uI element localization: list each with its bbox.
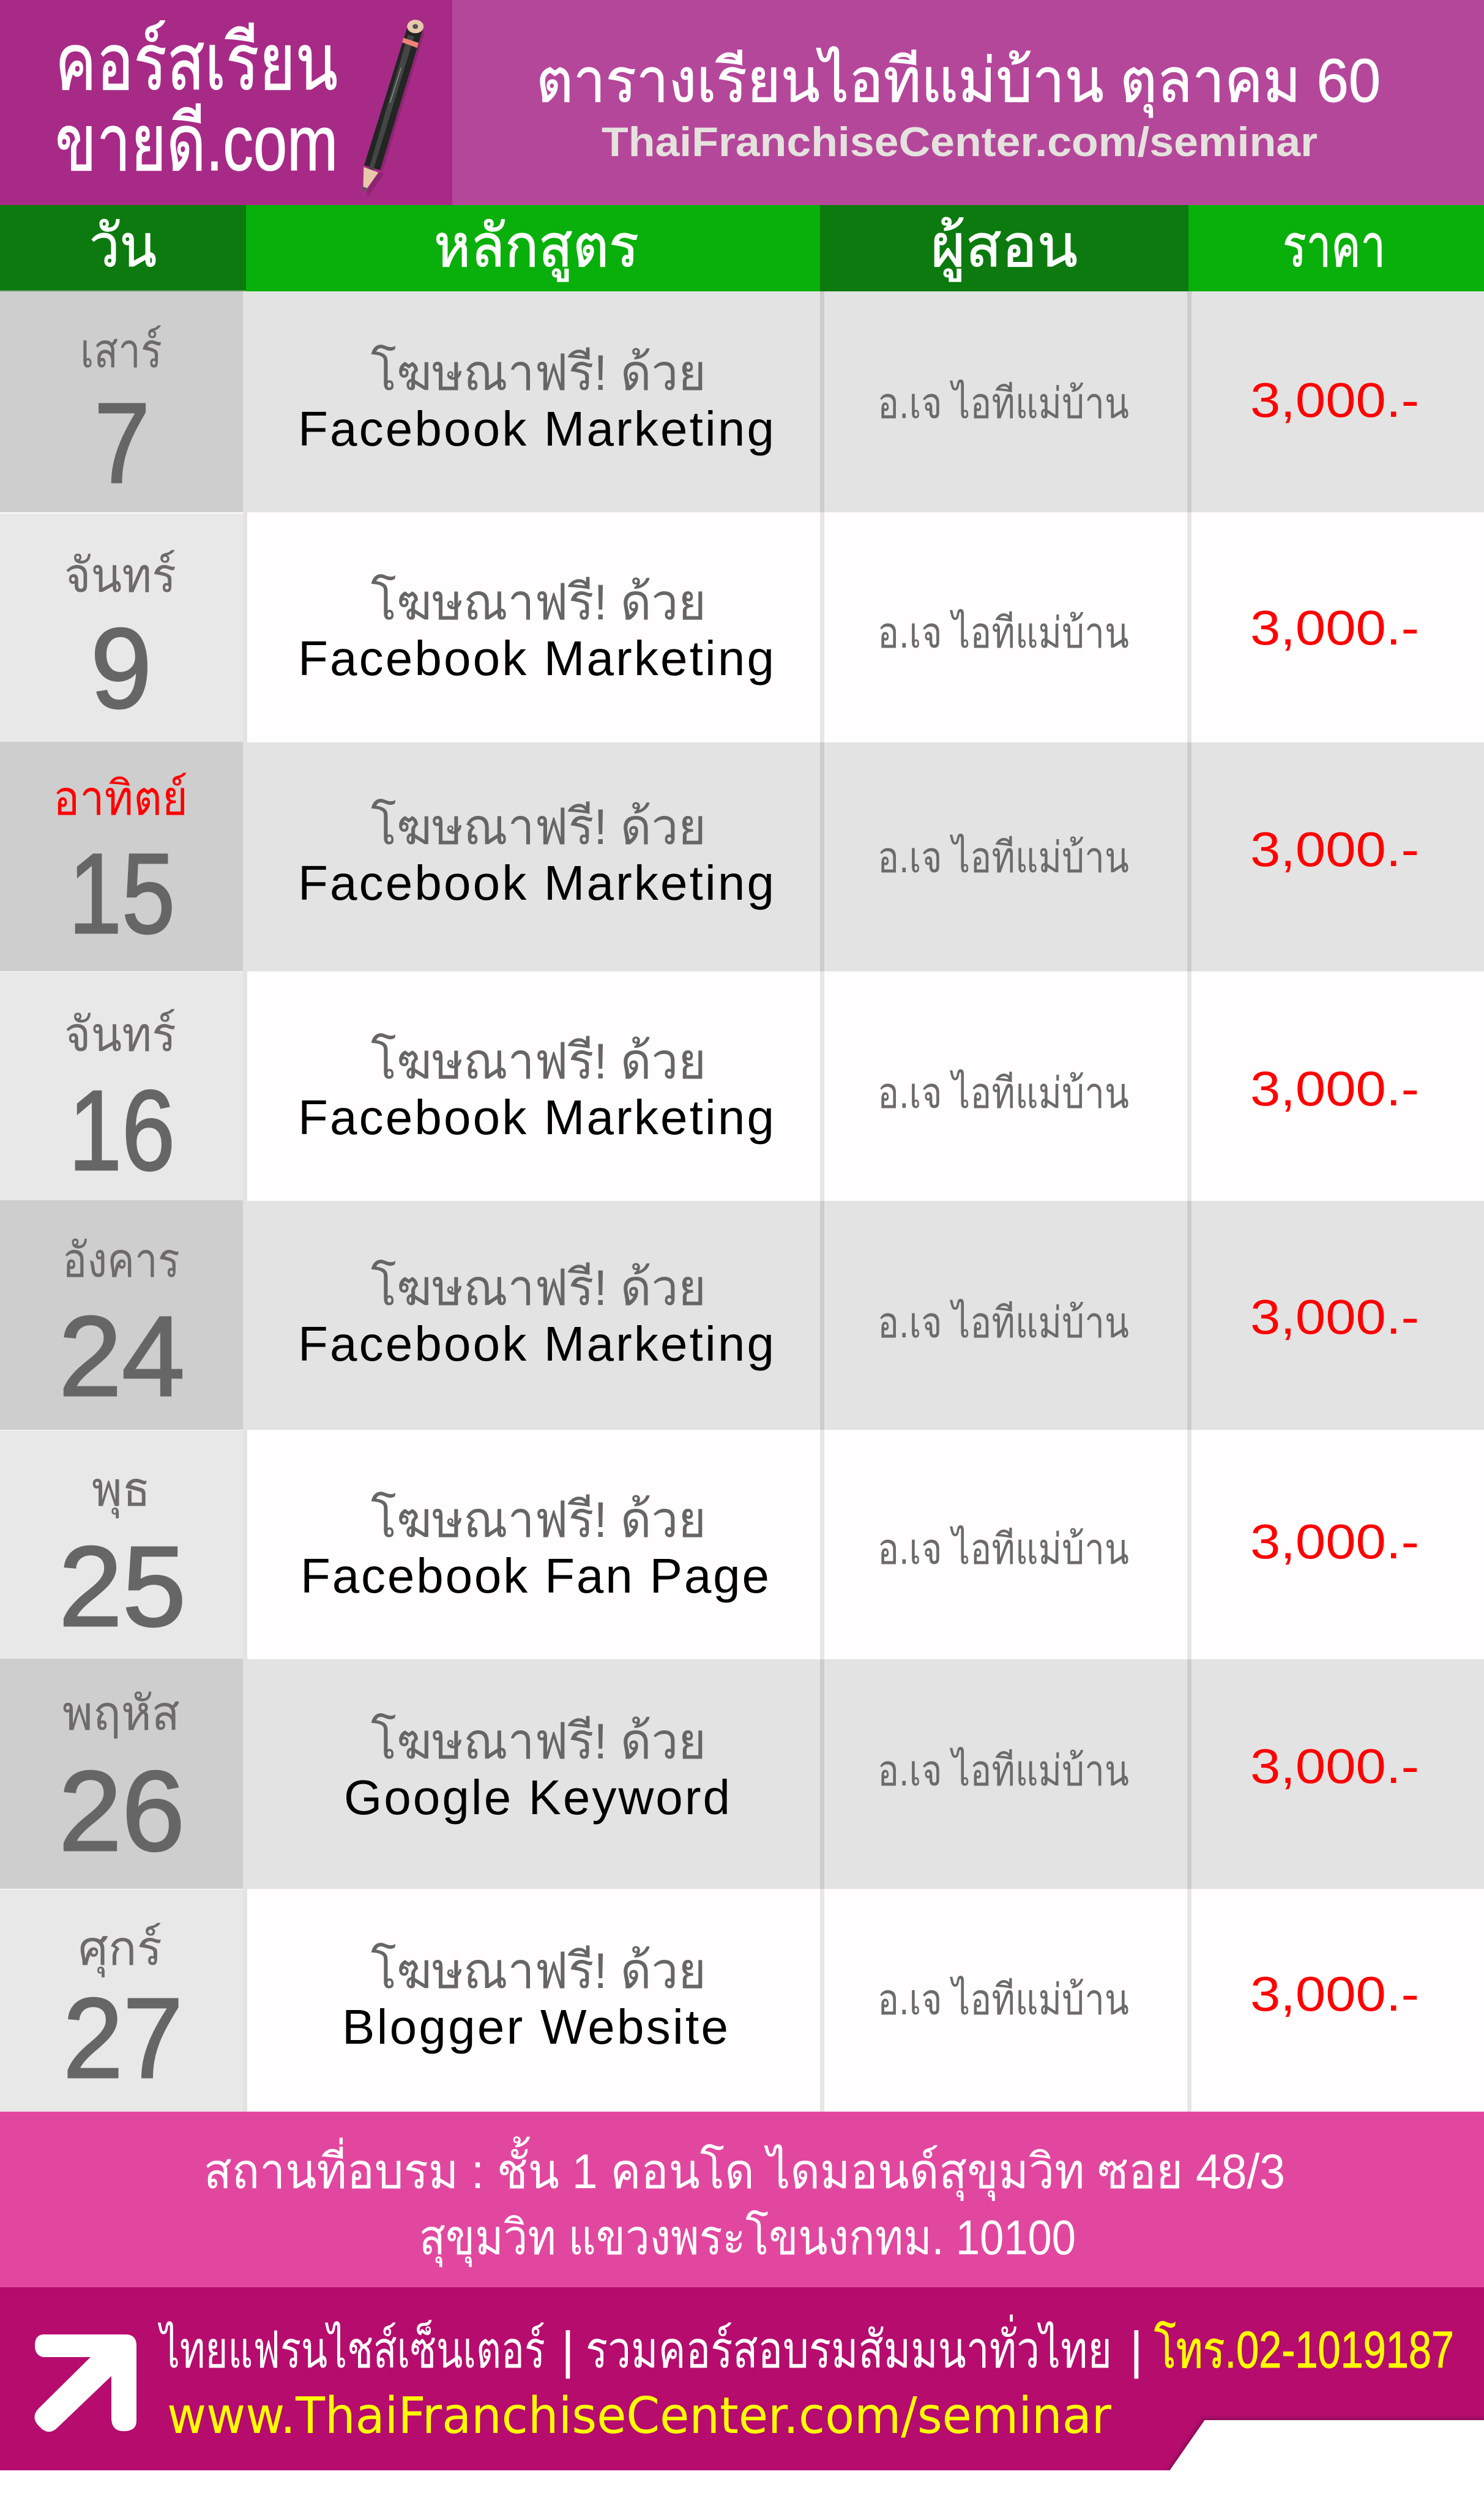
row 7: Thursday 26: Google Keyword (344, 1770, 730, 1825)
row 6: Wednesday 25: 25 (59, 1523, 186, 1650)
contact line white (157, 2314, 1143, 2379)
logo text line 2: ขายดี.com (55, 100, 338, 187)
contact line white: ไทยแฟรนไชส์เซ็นเตอร์ (157, 2320, 545, 2379)
row 4: Monday 16: 16 (69, 1067, 175, 1194)
row 6: Wednesday 25: พุธ (92, 1462, 151, 1519)
main title: ตารางเรียนไอทีแม่บ้าน ตุลาคม 60 (536, 47, 1381, 118)
header: course: หลักสูตร (434, 214, 639, 282)
row 7: Thursday 26: 26 (59, 1748, 185, 1875)
row 5: Tuesday 24: 3,000.- (1250, 1290, 1419, 1344)
row 4: Monday 16 (0, 971, 1484, 1201)
header: day: วัน (89, 214, 157, 279)
row 8: Friday 27: 27 (63, 1975, 183, 2102)
row 6: Wednesday 25: โฆษณาฟรี! ด้วย (371, 1492, 706, 1548)
row 6: Wednesday 25: 3,000.- (1250, 1514, 1419, 1569)
contact line white: | (561, 2321, 575, 2379)
row 7: Thursday 26: อ.เจ ไอทีแม่บ้าน (878, 1747, 1129, 1795)
row 4: Monday 16: จันทร์ (64, 1007, 176, 1061)
row 1: Saturday 7: 7 (94, 380, 150, 507)
panel: footer contact (0, 2287, 1484, 2473)
row 2: Monday 9: Facebook Marketing (298, 631, 774, 686)
row 1: Saturday 7: เสาร์ (80, 324, 162, 378)
row 1: Saturday 7: โฆษณาฟรี! ด้วย (371, 345, 706, 401)
row 1: Saturday 7: Facebook Marketing (298, 402, 774, 456)
icon: pencil (363, 20, 425, 197)
table header row (0, 205, 1484, 291)
header: price: ราคา (1283, 214, 1385, 279)
row 5: Tuesday 24: 24 (59, 1293, 185, 1420)
subtitle url: ThaiFranchiseCenter.com/seminar (602, 119, 1318, 165)
row 3: Sunday 15: อาทิตย์ (53, 771, 188, 825)
row 2: Monday 9: 3,000.- (1250, 600, 1419, 655)
row 8: Friday 27: 3,000.- (1250, 1967, 1419, 2021)
row 5: Tuesday 24: โฆษณาฟรี! ด้วย (371, 1260, 706, 1316)
icon: arrow (34, 2334, 136, 2432)
row 3: Sunday 15: อ.เจ ไอทีแม่บ้าน (878, 834, 1129, 881)
row 3: Sunday 15: 15 (69, 831, 175, 957)
row 8: Friday 27 (0, 1889, 1484, 2112)
row 7: Thursday 26 (0, 1659, 1484, 1889)
contact line white: รวมคอร์สอบรมสัมมนาทั่วไทย (586, 2314, 1112, 2379)
logo panel (0, 0, 452, 205)
row 7: Thursday 26: โฆษณาฟรี! ด้วย (371, 1714, 706, 1769)
row 4: Monday 16: อ.เจ ไอทีแม่บ้าน (878, 1069, 1129, 1117)
row 6: Wednesday 25: Facebook Fan Page (300, 1549, 769, 1603)
row 4: Monday 16: โฆษณาฟรี! ด้วย (371, 1034, 706, 1089)
logo text line 1: คอร์สเรียน (55, 19, 338, 107)
row 3: Sunday 15: โฆษณาฟรี! ด้วย (371, 799, 706, 855)
row 3: Sunday 15: 3,000.- (1250, 822, 1419, 876)
row 2: Monday 9: 9 (91, 605, 152, 732)
header banner (0, 0, 1484, 205)
row 1: Saturday 7: อ.เจ ไอทีแม่บ้าน (878, 379, 1129, 427)
row 8: Friday 27: โฆษณาฟรี! ด้วย (371, 1943, 706, 1999)
row 3: Sunday 15: Facebook Marketing (298, 856, 774, 910)
row 2: Monday 9: จันทร์ (64, 548, 176, 602)
row 2: Monday 9: โฆษณาฟรี! ด้วย (371, 575, 706, 630)
address line 1: สถานที่อบรม : ชั้น 1 คอนโด ไดมอนด์สุขุมวิท ซอย 48/3 (204, 2136, 1285, 2201)
address line 2: สุขุมวิท แขวงพระโขนงกทม. 10100 (419, 2210, 1076, 2267)
row 8: Friday 27: ศุกร์ (78, 1921, 162, 1978)
header: teacher: ผู้สอน (931, 214, 1078, 282)
website url: www.ThaiFranchiseCenter.com/seminar (167, 2387, 1111, 2445)
row 7: Thursday 26: 3,000.- (1250, 1739, 1419, 1793)
row 2: Monday 9: อ.เจ ไอทีแม่บ้าน (878, 609, 1129, 657)
row 6: Wednesday 25 (0, 1430, 1484, 1659)
row 4: Monday 16: Facebook Marketing (298, 1090, 774, 1145)
row 8: Friday 27: อ.เจ ไอทีแม่บ้าน (878, 1976, 1129, 2024)
row 5: Tuesday 24 (0, 1200, 1484, 1430)
row 4: Monday 16: 3,000.- (1250, 1061, 1419, 1116)
row 6: Wednesday 25: อ.เจ ไอทีแม่บ้าน (878, 1525, 1129, 1573)
row 8: Friday 27: Blogger Website (342, 2000, 728, 2054)
panel: venue address (0, 2112, 1484, 2287)
row 5: Tuesday 24: อังคาร (62, 1233, 180, 1287)
row 2: Monday 9 (0, 512, 1484, 742)
row 5: Tuesday 24: Facebook Marketing (298, 1317, 774, 1371)
row 1: Saturday 7 (0, 291, 1484, 514)
row 1: Saturday 7: 3,000.- (1250, 373, 1419, 427)
contact line white: | (1130, 2321, 1143, 2379)
row 7: Thursday 26: พฤหัส (62, 1686, 180, 1740)
row 3: Sunday 15 (0, 742, 1484, 972)
row 5: Tuesday 24: อ.เจ ไอทีแม่บ้าน (878, 1299, 1129, 1347)
